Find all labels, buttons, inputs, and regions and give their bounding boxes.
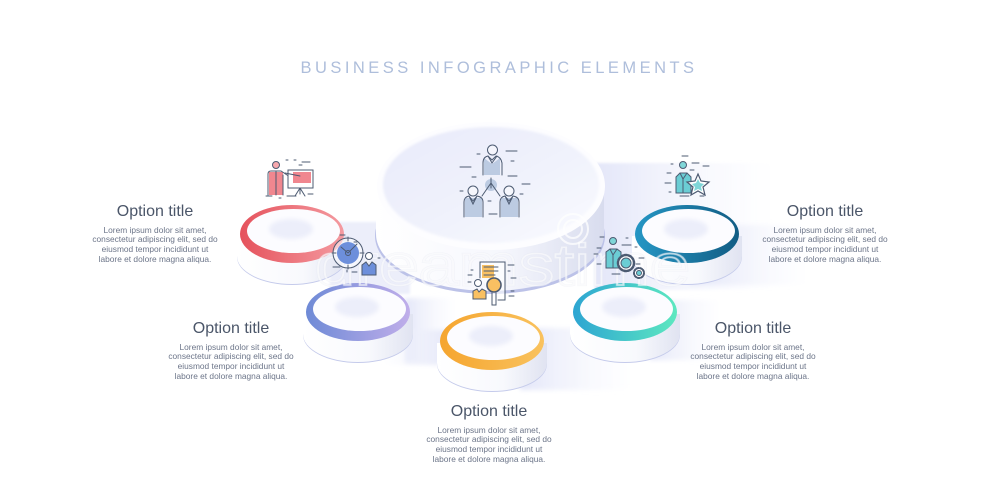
disc: blue <box>632 205 742 285</box>
text block: purple option: eiusmod tempor incididunt ut <box>178 361 284 371</box>
text block: purple option: consectetur adipiscing elit, sed do <box>168 351 294 361</box>
icon: person and gears <box>594 237 644 278</box>
text block: teal option: consectetur adipiscing elit, sed do <box>690 351 816 361</box>
watermark: dreamstime <box>315 233 690 298</box>
icon: presenter <box>266 160 313 198</box>
watermark: dreamstime <box>315 233 690 298</box>
text block: teal option: Lorem ipsum dolor sit amet, <box>702 342 804 352</box>
text block: blue option: consectetur adipiscing elit, sed do <box>762 234 888 244</box>
text block: red option: labore et dolore magna aliqua. <box>99 254 211 264</box>
text block: purple option: labore et dolore magna aliqua. <box>175 371 287 381</box>
text block: red option: consectetur adipiscing elit, sed do <box>92 234 218 244</box>
disc: red <box>237 205 347 285</box>
floor shadows <box>330 163 805 390</box>
text block: blue option: Lorem ipsum dolor sit amet, <box>774 224 876 234</box>
icon: team hierarchy <box>460 145 530 217</box>
disc: purple <box>303 283 413 363</box>
text block: red option: Option title <box>117 203 193 220</box>
text block: red option <box>92 203 218 264</box>
disc: orange <box>437 312 547 392</box>
text block: purple option: Lorem ipsum dolor sit amet, <box>180 342 282 352</box>
watermark emblem <box>558 214 588 244</box>
text block: orange option: labore et dolore magna aliqua. <box>433 454 545 464</box>
text block: purple option: Option title <box>193 320 269 337</box>
text block: teal option: eiusmod tempor incididunt ut <box>700 361 806 371</box>
text block: orange option <box>426 403 552 464</box>
central disc <box>375 122 605 294</box>
text block: teal option: labore et dolore magna aliqua. <box>697 371 809 381</box>
text block: teal option <box>690 320 816 381</box>
text block: orange option: eiusmod tempor incididunt ut <box>436 444 542 454</box>
text block: purple option <box>168 320 294 381</box>
title: BUSINESS INFOGRAPHIC ELEMENTS <box>300 59 698 77</box>
text block: red option: eiusmod tempor incididunt ut <box>102 244 208 254</box>
text block: blue option: eiusmod tempor incididunt ut <box>772 244 878 254</box>
text block: orange option: Lorem ipsum dolor sit amet, <box>438 424 540 434</box>
text block: blue option: Option title <box>787 203 863 220</box>
text block: teal option: Option title <box>715 320 791 337</box>
text block: blue option: labore et dolore magna aliqua. <box>769 254 881 264</box>
text block: orange option: consectetur adipiscing elit, sed do <box>426 434 552 444</box>
icon: clock and person <box>332 235 380 275</box>
disc: teal <box>570 283 680 363</box>
text block: blue option <box>762 203 888 264</box>
icon: person and star <box>665 156 709 196</box>
text block: red option: Lorem ipsum dolor sit amet, <box>104 224 206 234</box>
text block: orange option: Option title <box>451 403 527 420</box>
icon: certificate and magnifier <box>468 262 516 305</box>
